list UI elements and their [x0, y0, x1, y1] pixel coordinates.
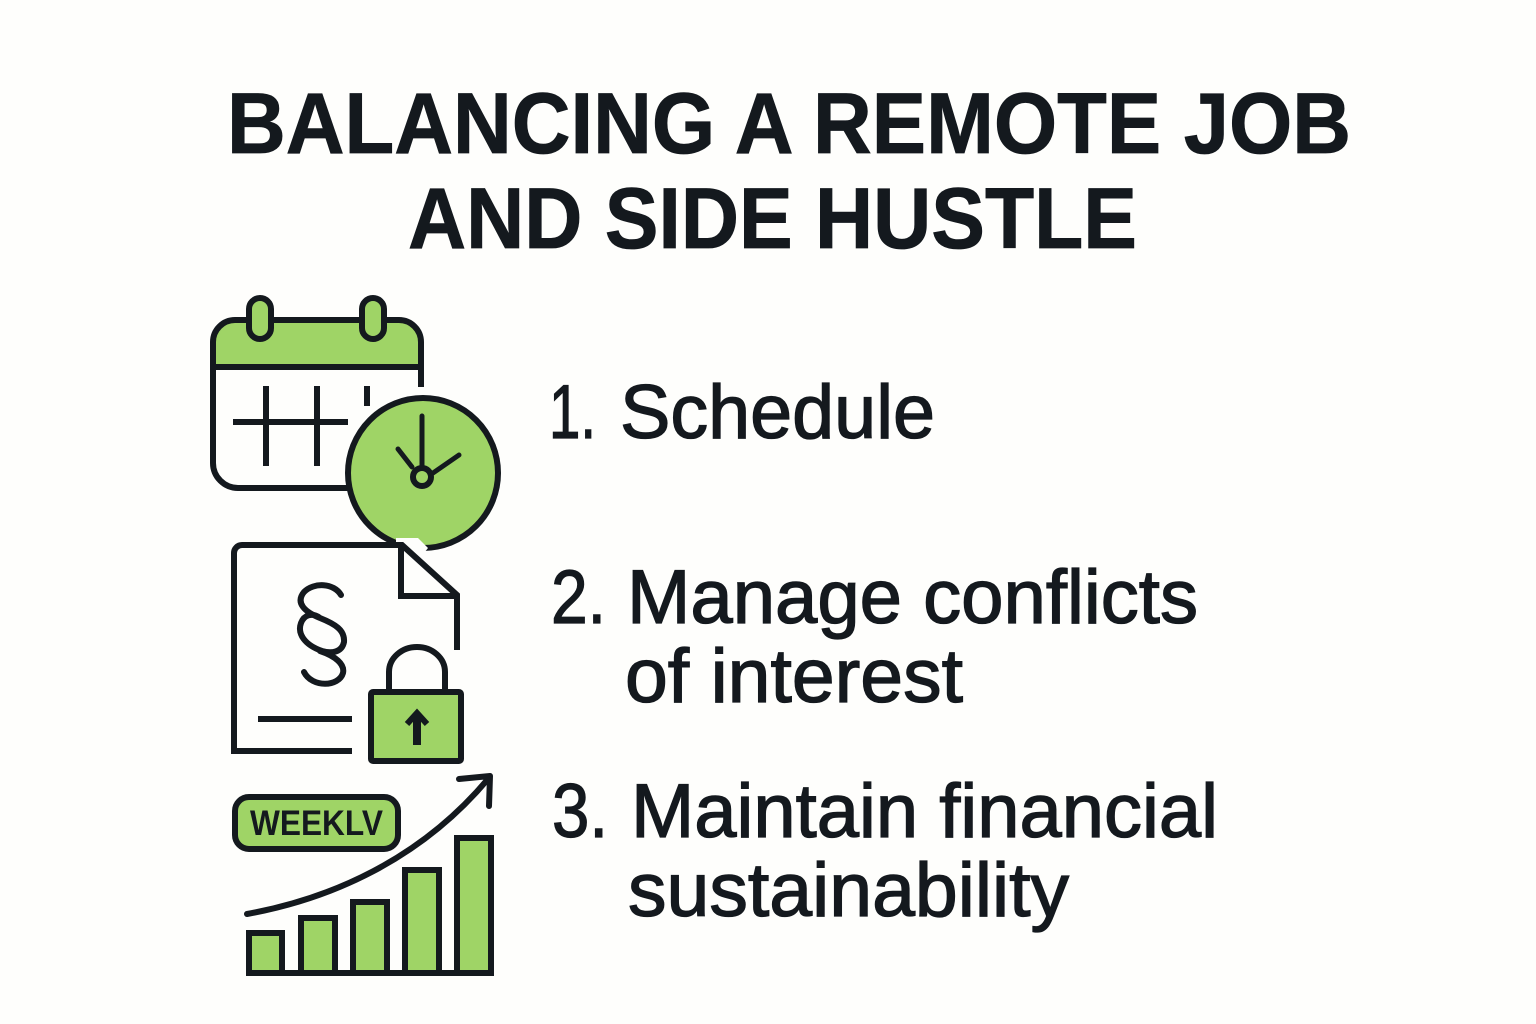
item 1: schedule: 1.: [549, 370, 596, 455]
item 2: manage conflicts of interest: [551, 555, 1198, 719]
title: BALANCING A REMOTE JOB: [227, 76, 1351, 172]
item 2: manage conflicts of interest: Manage conflicts: [627, 555, 1198, 640]
item 2: manage conflicts of interest: of interest: [625, 634, 963, 719]
icon: calendar with clock: [213, 298, 498, 548]
item 3: maintain financial sustainability: [552, 769, 1218, 933]
icon: weekly growth chart: [235, 776, 491, 973]
item 3: maintain financial sustainability: Maintain financial: [631, 769, 1218, 854]
growth arrow: [247, 776, 490, 914]
item 1: schedule: Schedule: [620, 370, 935, 455]
weekly badge: WEEKLV: [250, 804, 384, 843]
title: AND SIDE HUSTLE: [408, 171, 1137, 267]
bars: [249, 838, 491, 973]
title: [227, 76, 1351, 267]
weekly badge: [235, 797, 398, 849]
item 2: manage conflicts of interest: 2.: [551, 555, 606, 640]
item 3: maintain financial sustainability: sustainability: [628, 848, 1069, 933]
item 3: maintain financial sustainability: 3.: [552, 769, 608, 854]
icon: legal document with lock: [234, 538, 461, 761]
